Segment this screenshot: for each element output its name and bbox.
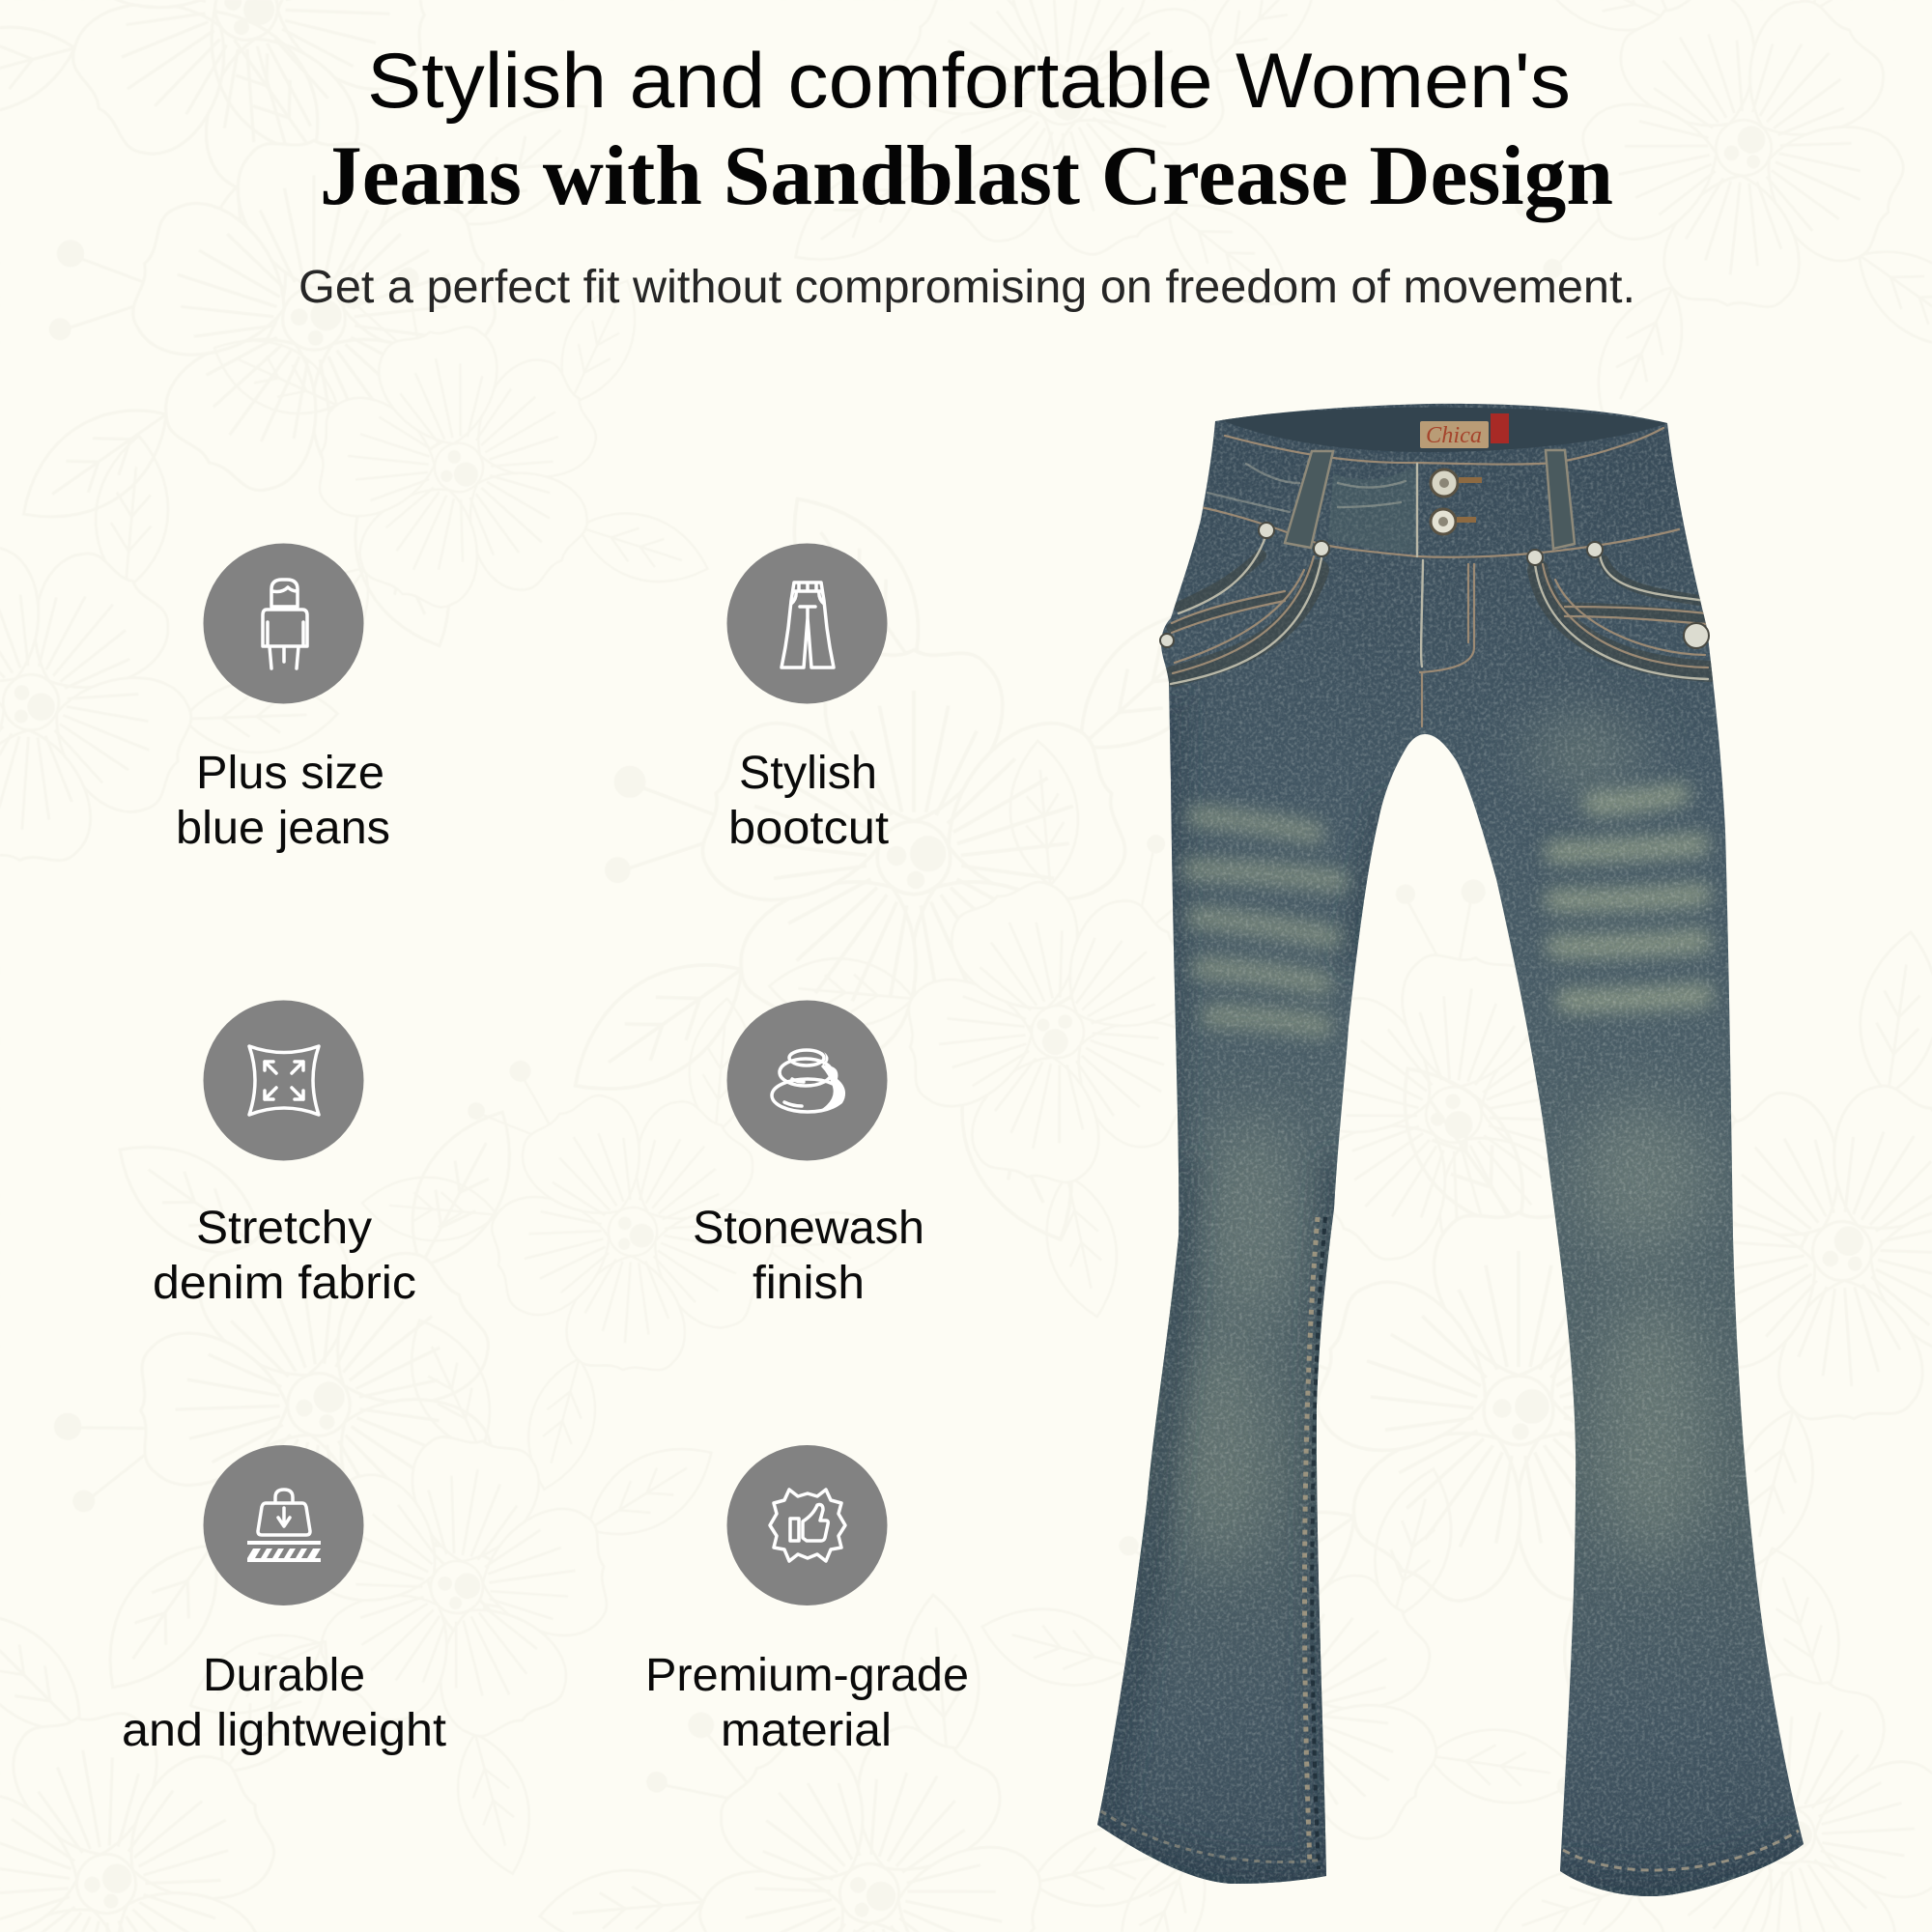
waistband shading and wrinkles (1208, 464, 1417, 553)
darker hems and side edges (1092, 696, 1806, 1894)
denim body (1097, 404, 1804, 1896)
pocket bands (1172, 555, 1710, 676)
rivets (1160, 523, 1709, 648)
feature: premium-grade material (645, 1445, 969, 1756)
feature: stonewash finish: finish (753, 1258, 865, 1309)
denim speckle texture (1082, 386, 1816, 1913)
icon: thumbs-up badge (726, 1445, 887, 1605)
subtitle: Get a perfect fit without compromising on freedom of movement. (298, 262, 1635, 313)
feature: plus size blue jeans: Plus size (196, 748, 384, 799)
title: Jeans with Sandblast Crease Design (320, 129, 1613, 223)
icon: bootcut trousers (726, 543, 887, 703)
belt loops (1285, 450, 1575, 549)
leg side seam (1305, 1217, 1318, 1864)
jeans illustration (1082, 386, 1816, 1913)
icon: person (203, 543, 363, 703)
feature: stonewash finish: Stonewash (693, 1203, 924, 1254)
waistband and pocket stitching (1171, 428, 1708, 726)
feature: stylish bootcut: bootcut (728, 803, 889, 854)
feature: stretchy denim fabric (153, 1001, 416, 1309)
feature: premium-grade material: material (721, 1705, 892, 1756)
feature: durable and lightweight: and lightweight (122, 1705, 446, 1756)
feature: plus size blue jeans: blue jeans (176, 803, 390, 854)
feature: stonewash finish (693, 1001, 924, 1309)
title (320, 38, 1613, 223)
sandblast crease bands: left leg (1193, 816, 1338, 1026)
sandblast crease bands: right leg (1555, 794, 1702, 1001)
feature: durable and lightweight: Durable (203, 1650, 365, 1701)
feature: premium-grade material: Premium-grade (645, 1650, 969, 1701)
brand label (1420, 413, 1509, 448)
icon: stacked stones (726, 1001, 887, 1161)
brand label: Chica (1426, 423, 1482, 448)
front buttons (1431, 469, 1482, 534)
icon: stretch square (203, 1001, 363, 1161)
faded wash on the legs (1179, 715, 1710, 1575)
feature: stylish bootcut (726, 543, 889, 854)
icon: weight on fabric (203, 1445, 363, 1605)
feature: stretchy denim fabric: denim fabric (153, 1258, 416, 1309)
feature: durable and lightweight (122, 1445, 446, 1756)
title: Stylish and comfortable Women's (367, 38, 1571, 125)
feature: stretchy denim fabric: Stretchy (196, 1203, 372, 1254)
feature: plus size blue jeans (176, 543, 390, 854)
feature: stylish bootcut: Stylish (739, 748, 877, 799)
inner back waistband (1219, 408, 1667, 452)
